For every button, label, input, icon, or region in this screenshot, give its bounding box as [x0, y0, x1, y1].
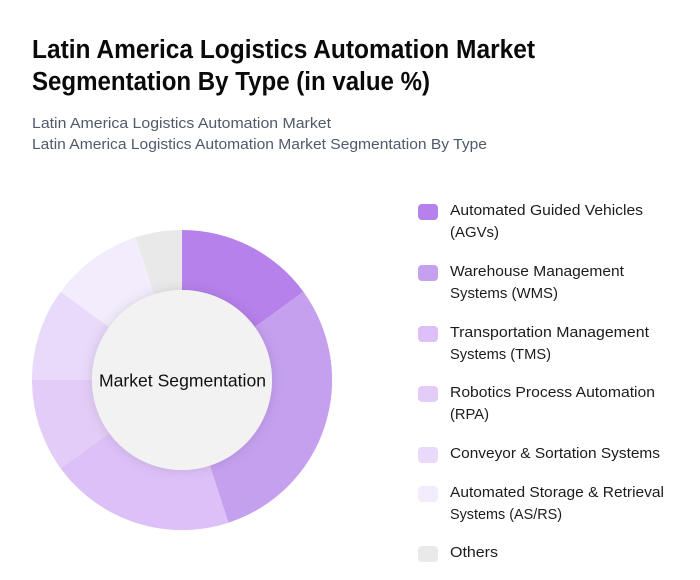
segment: Automated Storage and Retrieval Systems: [61, 237, 154, 327]
legend item: TMS: Systems (TMS): [450, 346, 551, 363]
subtitle: Latin America Logistics Automation Market: [32, 115, 332, 132]
legend item: TMS: Transportation Management: [450, 324, 650, 341]
title: [32, 36, 535, 96]
subtitle: Latin America Logistics Automation Market Segmentation By Type: [32, 136, 487, 153]
title: Segmentation By Type (in value %): [32, 68, 430, 96]
segment: Warehouse Management Systems: [210, 292, 332, 523]
donut chart: [32, 230, 332, 530]
legend item: WMS: Warehouse Management: [450, 263, 625, 280]
segment: Transportation Management Systems: [61, 433, 228, 530]
legend item: RPA: [418, 384, 655, 423]
legend item: AS/RS: Systems (AS/RS): [450, 506, 562, 523]
legend item: AGVs: [418, 202, 643, 241]
legend item: Others: [418, 544, 498, 562]
centre label: Market Segmentation: [99, 370, 266, 390]
segment: Conveyor and Sortation Systems: [32, 292, 109, 380]
legend item: Conveyor and Sortation: Conveyor & Sortation Systems: [450, 445, 660, 462]
legend item: WMS: [418, 263, 625, 302]
legend item: WMS: Systems (WMS): [450, 285, 558, 302]
segment: Others: [136, 230, 182, 294]
legend item: RPA: (RPA): [450, 406, 489, 423]
legend item: TMS: [418, 324, 650, 363]
segment: Automated Guided Vehicles: [182, 230, 303, 327]
legend item: AS/RS: Automated Storage & Retrieval: [450, 484, 664, 501]
legend item: RPA: Robotics Process Automation: [450, 384, 655, 401]
legend item: AS/RS: [418, 484, 664, 523]
legend item: AGVs: Automated Guided Vehicles: [450, 202, 643, 219]
legend item: AGVs: (AGVs): [450, 224, 499, 241]
legend item: Others: Others: [450, 544, 498, 561]
subtitle: [32, 115, 487, 153]
legend: [418, 202, 664, 562]
donut centre: [92, 290, 272, 470]
segment: Robotics Process Automation: [32, 380, 109, 468]
title: Latin America Logistics Automation Market: [32, 36, 535, 64]
